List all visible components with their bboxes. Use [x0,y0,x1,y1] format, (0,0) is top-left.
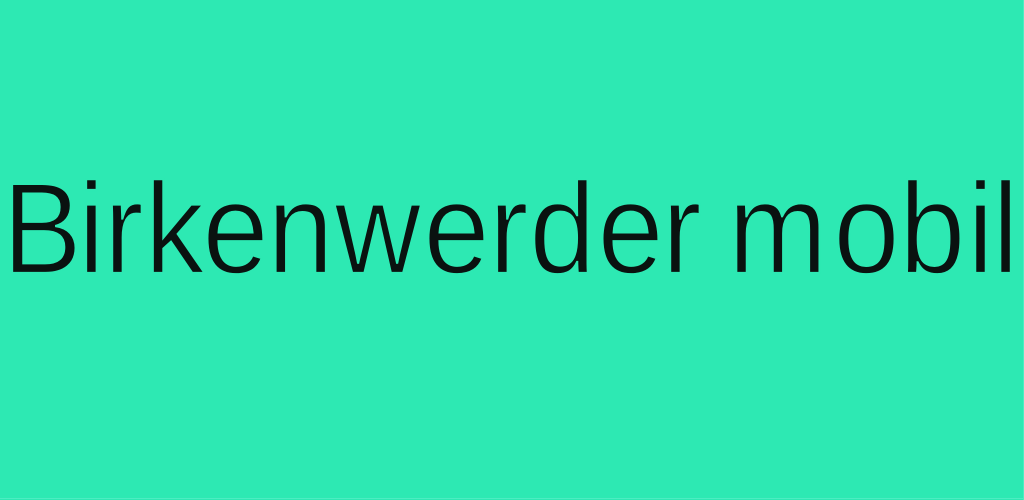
title: Birkenwerder mobil [2,156,1019,301]
